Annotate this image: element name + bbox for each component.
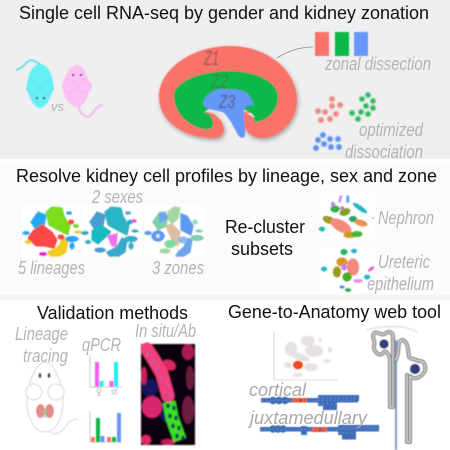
- diagram: nephron anatomy: [366, 326, 425, 450]
- label: in situ/Ab: In situ/Ab: [135, 321, 196, 341]
- marker: nephron dot: [372, 217, 374, 219]
- red expression cluster: [293, 361, 303, 369]
- heading: resolve: Resolve kidney cell profiles by lineage, sex and zone: [16, 166, 437, 186]
- label: lineage tracing: [15, 324, 68, 366]
- label: vs: vs: [51, 99, 64, 114]
- image: immunofluorescence micrograph: [141, 344, 195, 445]
- chart: tSNE by zone: [145, 206, 205, 257]
- icon: pink mouse: [62, 65, 103, 117]
- text: re-cluster subsets: subsets: [231, 239, 293, 259]
- diagram: juxtamedullary nephron bar: [260, 425, 379, 440]
- chart: ureteric epithelium subset: [319, 247, 375, 293]
- chart: tSNE by sex: [82, 206, 142, 257]
- arrow: kidney to dissection: [277, 47, 313, 58]
- label: lineage tracing: Lineage: [15, 324, 68, 344]
- panel: single cell RNA-seq: [0, 0, 450, 159]
- label: 3 zones: 3 zones: [152, 258, 204, 278]
- icon: outline mouse with kidneys: [26, 362, 78, 434]
- label: ureteric epithelium: Ureteric: [378, 252, 430, 272]
- diagram: cortical nephron bar: [261, 395, 359, 410]
- text: re-cluster subsets: Re-cluster: [225, 217, 305, 237]
- label: cortical: cortical: [249, 380, 307, 400]
- text: re-cluster subsets: [225, 217, 305, 259]
- panel: resolve profiles: [0, 163, 450, 295]
- heading: gene-to-anatomy: Gene-to-Anatomy web tool: [228, 302, 441, 322]
- label: ureteric epithelium: epithelium: [367, 274, 434, 294]
- heading: single cell: Single cell RNA-seq by gender and kidney zonation: [19, 3, 429, 23]
- label: qPCR: qPCR: [82, 335, 121, 355]
- label: 2 sexes: 2 sexes: [91, 187, 143, 207]
- icon: red dissociated cells: [315, 96, 343, 123]
- label: ureteric epithelium: [367, 252, 434, 294]
- chart: nephron subset: [319, 193, 375, 239]
- diagram: kidney zones: [159, 46, 297, 138]
- chart: tSNE by lineage: [22, 206, 81, 257]
- chart: qPCR by sex: [90, 355, 122, 396]
- label: optimized dissociation: [345, 120, 424, 162]
- diagram: kidney zones: Z1: [203, 48, 219, 70]
- icon: green dissociated cells: [349, 92, 376, 122]
- label: 5 lineages: 5 lineages: [18, 258, 85, 278]
- chart: qPCR by zone: [90, 411, 122, 442]
- label: optimized dissociation: optimized: [359, 120, 424, 140]
- label: lineage tracing: tracing: [23, 346, 68, 366]
- chart: gene expression tSNE: [274, 331, 338, 380]
- icon: cyan mouse: [16, 60, 54, 108]
- label: zonal dissection: zonal dissection: [324, 54, 431, 74]
- icon: blue dissociated cells: [313, 132, 342, 151]
- label: juxtamedullary: juxtamedullary: [247, 408, 368, 428]
- label: optimized dissociation: dissociation: [345, 142, 423, 162]
- heading: validation methods: Validation methods: [37, 303, 188, 323]
- diagram: kidney zones: Z2: [210, 71, 228, 93]
- diagram: kidney zones: Z3: [218, 92, 235, 112]
- divider band: [0, 295, 450, 300]
- label: nephron: Nephron: [378, 208, 434, 228]
- zonal dissection blocks: [315, 32, 368, 56]
